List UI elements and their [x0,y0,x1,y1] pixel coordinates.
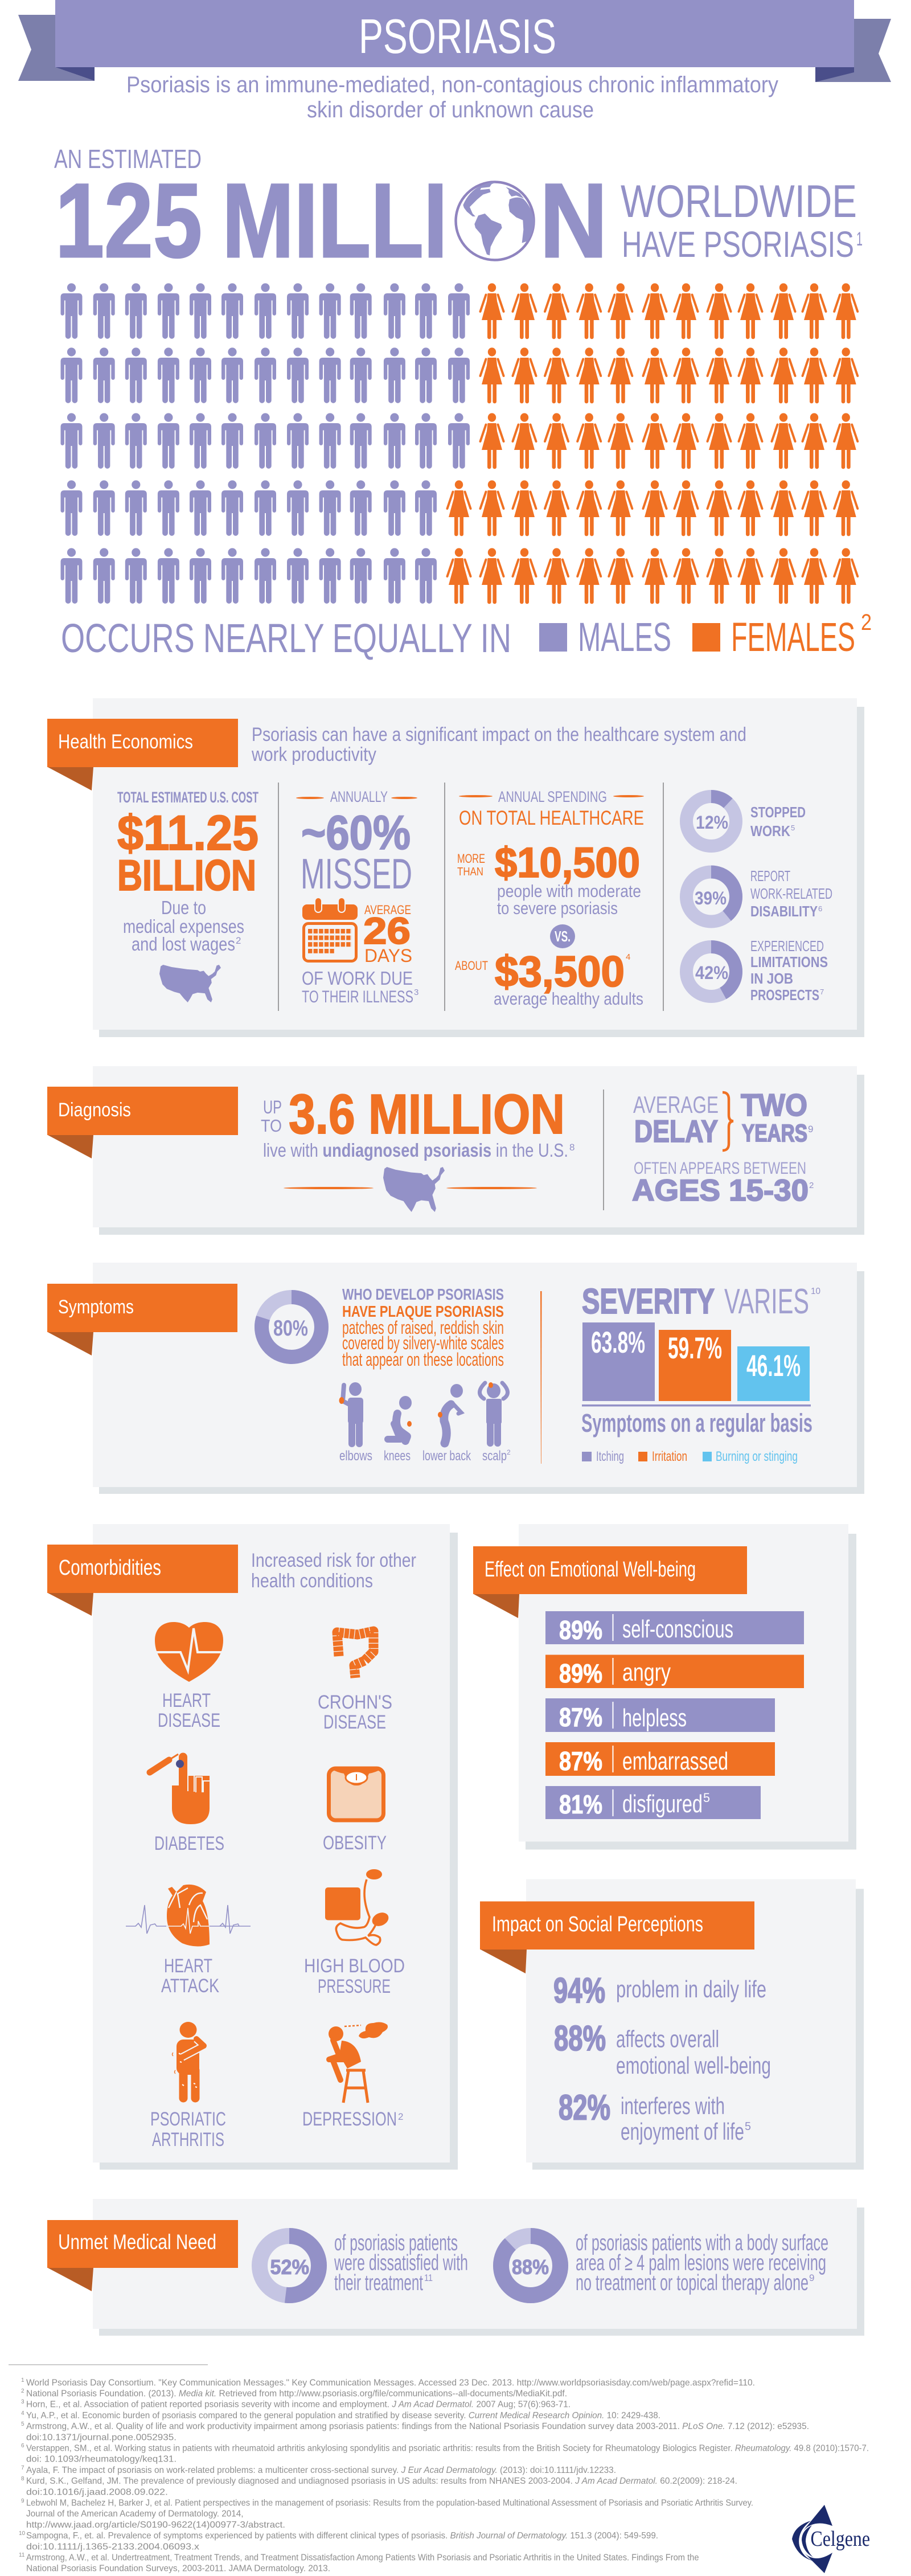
heading: health economics: Health Economics [58,731,193,753]
heading: diagnosis: Diagnosis [58,1099,131,1121]
item: diabetes: DIABETES [154,1833,224,1854]
bar: helpless: 87% [559,1702,602,1732]
column: work limitations donuts [687,796,832,1004]
references: 10 [19,2530,26,2537]
stat: 3.6 million undiagnosed: 3.6 MILLION [289,1083,565,1145]
references: 3 [21,2399,24,2405]
legend: occurs nearly equally: 2 [861,610,872,635]
references: 1 [21,2377,24,2383]
icon: elbows figure [339,1382,363,1444]
donut: 80% plaque psoriasis [262,1297,321,1357]
heading: emotional well-being [473,1546,747,1594]
column: total cost: and lost wages [132,933,235,955]
donut: 42% job prospects: 7 [820,988,824,996]
stat: 82%: enjoyment of life [621,2118,744,2145]
donut: 39% disability: 6 [818,904,822,913]
item: high blood pressure [304,1869,405,1997]
text: plaque psoriasis description: that appear on these locations [342,1349,504,1370]
column: missed work: AVERAGE [364,903,411,917]
text: body surface area treatment: 9 [809,2272,814,2283]
stat: 88%: affects overall [616,2025,719,2053]
heading: unmet medical need [47,2220,238,2268]
subtitle definition: skin disorder of unknown cause [307,97,594,122]
donut: 42% job prospects: IN JOB [750,970,793,987]
stat: average delay two years: 9 [808,1124,813,1135]
column: missed work: 26 [363,910,411,952]
references: 6 [21,2443,24,2449]
item: obesity [323,1768,387,1854]
bar: helpless [545,1698,775,1732]
bar: disfigured: disfigured [622,1790,703,1818]
column: total cost: BILLION [117,851,256,900]
location labels: scalp [482,1448,507,1464]
references: 7 [21,2465,24,2471]
column: missed work: DAYS [364,945,412,966]
section intro text: health conditions [251,1570,373,1592]
column: annual spending: $3,500 [495,948,625,996]
column: annual spending: average healthy adults [494,989,643,1009]
bar: angry [545,1655,804,1688]
stat: 94%: 94% [553,1971,605,2010]
stat: average delay two years: YEARS [742,1120,807,1147]
stat: average delay two years [632,1087,814,1207]
column: missed work: 3 [414,988,418,997]
stat: 82% [559,2088,751,2145]
panel: effect on emotional well-being [473,1524,856,1850]
donut: 39% disability [687,867,832,922]
stat: 94%: problem in daily life [616,1976,766,2002]
stat: 82%: interferes with [621,2092,725,2119]
references: Sampogna, F., et. al. Prevalence of symptoms experienced by patients with different clinical types of psoriasis. British Journal of Dermatology. 151.3 (2004): 549-599. [26,2531,658,2541]
item: crohn's disease: CROHN'S [318,1692,392,1713]
title: PSORIASIS [359,10,556,64]
item: depression: DEPRESSION [302,2108,397,2130]
item: crohn's disease: DISEASE [323,1711,386,1733]
donut: 39% disability: WORK-RELATED [750,885,832,902]
stat: average delay two years: TWO [741,1087,807,1123]
stat: average delay two years: DELAY [634,1113,718,1149]
references: National Psoriasis Foundation. (2013). Media kit. Retrieved from http://www.psoriasis.org/file/communications--all-documents/MediaKit.pdf. [26,2389,567,2399]
text: dissatisfied with treatment: of psoriasis patients [334,2231,458,2255]
panel: diagnosis [47,1066,864,1235]
references: doi:10.1016/j.jaad.2008.09.022. [26,2487,168,2497]
column: annual spending: ABOUT [455,959,488,973]
item: heart attack: HEART [164,1955,212,1977]
heading: comorbidities [47,1545,238,1593]
column: annual spending: THAN [457,866,483,878]
donut: 12% stopped work: 5 [791,824,795,832]
bar: self-conscious: self-conscious [622,1615,733,1643]
stat: 3.6 million undiagnosed: 8 [569,1142,574,1153]
column: missed work: TO THEIR ILLNESS [302,988,413,1006]
stat: 3.6 million undiagnosed [261,1083,574,1212]
logo: Celgene [792,2505,870,2573]
text: dissatisfied with treatment: their treatment [334,2271,423,2295]
bar: self-conscious: 89% [559,1615,602,1645]
item: diabetes [150,1753,224,1854]
column: total cost: medical expenses [123,916,244,937]
item: depression: 2 [398,2111,403,2122]
stat: average delay two years: OFTEN APPEARS BETWEEN [634,1159,806,1178]
references [19,2377,869,2574]
item: psoriatic arthritis: ARTHRITIS [152,2129,224,2151]
donut: 88% untreated [501,2236,560,2295]
stat: average delay two years: AVERAGE [633,1091,719,1118]
item: heart disease: HEART [162,1690,211,1711]
bar: self-conscious [545,1611,804,1645]
column: missed work: MISSED [301,850,412,898]
references: 11 [19,2552,25,2558]
heading: symptoms: Symptoms [58,1296,134,1318]
stat: 88%: 88% [554,2019,606,2058]
section intro text: Increased risk for other [251,1550,416,1571]
text: dissatisfied with treatment: were dissatisfied with [334,2251,468,2275]
item: heart disease: DISEASE [158,1710,220,1731]
column: annual spending: 4 [626,952,630,962]
icon: US map [159,965,221,1002]
stat: 82%: 5 [745,2120,751,2133]
column: annual spending: MORE [457,851,485,866]
headline statistic: 125 million worldwide: 125 [55,162,202,280]
bar chart: severity varies: SEVERITY [582,1282,715,1321]
icon: scalp figure [479,1382,508,1443]
headline statistic: 125 million worldwide [54,144,863,280]
bar: helpless: helpless [622,1704,687,1732]
references: 2 [21,2388,24,2394]
heading: comorbidities: Comorbidities [59,1556,161,1580]
headline statistic: 125 million worldwide: 1 [856,228,863,250]
heading: unmet medical need: Unmet Medical Need [58,2230,216,2254]
headline statistic: 125 million worldwide: N [540,162,608,280]
references: doi:10.1111/j.1365-2133.2004.06093.x [26,2542,199,2552]
column: total cost: $11.25 [117,806,258,861]
stat: average delay two years: 2 [809,1181,814,1190]
icon: US map [383,1167,445,1212]
chart legend: Irritation [652,1449,687,1464]
headline statistic: 125 million worldwide: WORLDWIDE [621,176,857,227]
section intro text: work productivity [251,744,376,765]
bar chart: severity varies [581,1282,820,1464]
references: World Psoriasis Day Consortium. "Key Communication Messages." Key Communication Messages. Accessed 23 Dec. 2013. http://www.worldpsoriasisday.com/web/page.aspx?refid=110. [26,2378,755,2387]
references: 9 [21,2498,24,2504]
donut: 12% stopped work [687,796,806,846]
stat: 88% [554,2019,771,2079]
stat: 3.6 million undiagnosed: live with undiagnosed psoriasis in the U.S. [263,1140,568,1161]
section intro text: Psoriasis can have a significant impact on the healthcare system and [252,724,746,746]
item: heart disease [155,1622,223,1731]
column: annual spending: people with moderate [497,881,641,901]
section intro text [251,724,746,765]
references: Journal of the American Academy of Dermatology. 2014, [26,2509,244,2519]
donut: 88% untreated: 88% [512,2255,549,2279]
heading: diagnosis [47,1087,238,1135]
heading: social perceptions: Impact on Social Perceptions [492,1912,703,1936]
donut: 42% job prospects: PROSPECTS [750,986,819,1004]
vs badge [550,924,575,948]
column: total cost: 2 [236,935,241,946]
references: Ayala, F. The impact of psoriasis on work-related problems: a multicenter cross-sectional survey. J Eur Acad Dermatology. (2013): doi:10.1111/jdv.12233. [26,2466,616,2475]
item: depression [302,2022,403,2130]
column: total cost [117,789,258,1002]
text: plaque psoriasis description: covered by silvery-white scales [342,1333,504,1353]
references: 5 [21,2421,24,2427]
chart legend: Itching [596,1449,624,1464]
references: doi: 10.1093/rheumatology/keq131. [26,2455,177,2464]
text: plaque psoriasis description: patches of raised, reddish skin [342,1317,504,1338]
references: Yu, A.P., et al. Economic burden of psoriasis compared to the general population and stratified by disease severity. Current Medical Research Opinion. 10: 2429-438. [26,2411,660,2421]
item: heart attack [126,1885,251,1997]
heading: social perceptions [480,1901,754,1950]
bar chart: severity varies: VARIES [724,1282,809,1321]
stat: 94% [553,1971,766,2010]
bar chart: severity varies: 10 [811,1287,820,1296]
column: annual spending: ON TOTAL HEALTHCARE [459,807,644,829]
donut: 42% job prospects: LIMITATIONS [750,953,828,970]
bar chart: severity varies: 46.1% [746,1349,801,1383]
heading: emotional well-being: Effect on Emotional Well-being [485,1558,696,1582]
stat: 88%: emotional well-being [616,2052,771,2079]
bar chart: severity varies: 59.7% [668,1332,722,1365]
donut: 12% stopped work: 12% [696,812,728,833]
bar chart: severity varies: 63.8% [591,1326,645,1359]
column: missed work [296,788,418,1006]
column: annual spending: ANNUAL SPENDING [498,788,607,805]
vs badge: VS. [555,928,571,945]
text: body surface area treatment [576,2231,828,2295]
donut: 39% disability: 39% [695,888,727,908]
item: crohn's disease [318,1631,392,1733]
references: 4 [21,2410,24,2417]
stat: 82%: 82% [559,2088,610,2128]
donut: 80% plaque psoriasis: 80% [273,1316,308,1341]
subtitle definition: Psoriasis is an immune-mediated, non-contagious chronic inflammatory [126,72,778,97]
icon: knees figure [388,1396,412,1441]
location labels: elbows [339,1448,372,1464]
references: Horn, E., et al. Association of patient reported psoriasis severity with income and employment. J Am Acad Dermatol. 2007 Aug; 57(6):963-71. [26,2400,571,2410]
panel: impact on social perceptions [480,1879,864,2170]
location labels: lower back [422,1448,471,1464]
bar: disfigured [545,1786,761,1819]
donut: 12% stopped work: WORK [750,822,790,839]
location labels [339,1448,511,1464]
column: annual spending: $10,500 [495,839,640,886]
section intro text [251,1550,416,1592]
item: high blood pressure: HIGH BLOOD [304,1955,405,1977]
item: heart attack: ATTACK [161,1975,219,1997]
column: missed work: OF WORK DUE [302,968,413,989]
donut: 12% stopped work: STOPPED [750,804,806,821]
text: plaque psoriasis description: WHO DEVELOP PSORIASIS [342,1285,504,1303]
bar: embarrassed [545,1742,775,1776]
item: obesity: OBESITY [323,1832,387,1854]
item: psoriatic arthritis [150,2022,226,2151]
donut: 39% disability: DISABILITY [750,903,818,920]
panel: unmet medical need [47,2199,864,2336]
column: annual spending: to severe psoriasis [497,898,618,918]
stat: 3.6 million undiagnosed: TO [261,1116,282,1136]
text: plaque psoriasis description: HAVE PLAQUE PSORIASIS [342,1303,504,1320]
references: Verstappen, SM., et al. Working status in patients with rheumatoid arthritis ankylosing spondylitis and psoriatic arthritis: results from the British Society for Rheumatology Biologics Register. Rheumatology. 49.8 (2010):1570-7. [26,2443,869,2454]
heading: symptoms [47,1284,237,1332]
pictogram chart: 63 men and 62 women [60,283,857,604]
panel: health economics [47,698,864,1037]
donut: 42% job prospects: EXPERIENCED [750,937,824,955]
stat: average delay two years: AGES 15-30 [632,1174,809,1207]
subtitle definition [126,72,778,122]
bar: disfigured: 81% [559,1789,602,1819]
location labels: knees [384,1448,411,1464]
bar: embarrassed: embarrassed [622,1747,728,1775]
references: National Psoriasis Foundation Surveys, 2003-2011. JAMA Dermatology. 2013. [26,2564,330,2574]
chart legend [582,1449,798,1464]
references: Armstrong, A.W., et al. Undertreatment, Treatment Trends, and Treatment Dissatisfaction Among Patients With Psoriasis and Psoriatic Arthritis in the United States. Findings From the [26,2553,699,2563]
text: dissatisfied with treatment: 11 [424,2272,433,2283]
icon: calendar [302,898,358,961]
donut: 39% disability: REPORT [750,867,790,884]
column: missed work: ANNUALLY [330,788,388,805]
text: plaque psoriasis description [342,1285,504,1370]
legend: occurs nearly equally [61,610,872,661]
chart legend: Burning or stinging [716,1449,798,1464]
item: high blood pressure: PRESSURE [318,1976,391,1997]
logo: Celgene: Celgene [811,2527,870,2551]
references: Lebwohl M, Bachelez H, Barker J, et al. Patient perspectives in the management of psoriasis: Results from the population-based Multinational Assessment of Psoriasis and Psoriatic Arthritis Survey. [26,2498,753,2508]
icon: lower back figure [438,1384,463,1443]
headline statistic: 125 million worldwide: AN ESTIMATED [54,144,202,174]
references: Kurd, S.K., Gelfand, JM. The prevalence of previously diagnosed and undiagnosed psoriasis in US adults: results from NHANES 2003-2004. J Am Acad Dermatol. 60.2(2009): 218-24. [26,2476,737,2486]
bar: angry: 89% [559,1658,602,1688]
references: doi:10.1371/journal.pone.0052935. [26,2432,177,2442]
panel: comorbidities [47,1524,458,2170]
item: psoriatic arthritis: PSORIATIC [150,2108,226,2130]
column: missed work: ~60% [301,806,411,859]
column: total cost: Due to [161,897,206,918]
icon: globe [456,182,535,260]
heading: health economics [47,719,238,767]
panel: symptoms [47,1263,864,1494]
bar: disfigured: 5 [703,1791,710,1805]
legend: occurs nearly equally: MALES [578,615,671,660]
references: 8 [21,2476,24,2482]
donut: 42% job prospects: 42% [695,963,728,983]
stat: 3.6 million undiagnosed: UP [263,1097,282,1117]
location labels: 2 [507,1448,511,1456]
donut: 42% job prospects [687,937,828,1004]
headline statistic: 125 million worldwide: MILLI [222,162,448,280]
legend: occurs nearly equally: OCCURS NEARLY EQUALLY IN [61,616,511,661]
column: annual spending [455,788,644,1009]
references: http://www.jaad.org/article/S0190-9622(14)00977-3/abstract. [26,2520,285,2530]
text: dissatisfied with treatment [334,2231,468,2295]
bar: angry: angry [622,1658,671,1686]
donut: 52% dissatisfied: 52% [270,2255,309,2279]
donut: 52% dissatisfied [260,2236,319,2295]
bar: embarrassed: 87% [559,1746,602,1776]
references: Armstrong, A.W., et al. Quality of life and work productivity impairment among psoriasis patients: findings from the National Psoriasis Foundation survey data 2003-2011. PLoS One. 7.12 (2012): e52935. [26,2422,809,2431]
column: total cost: TOTAL ESTIMATED U.S. COST [117,789,258,806]
header ribbon [18,0,891,82]
